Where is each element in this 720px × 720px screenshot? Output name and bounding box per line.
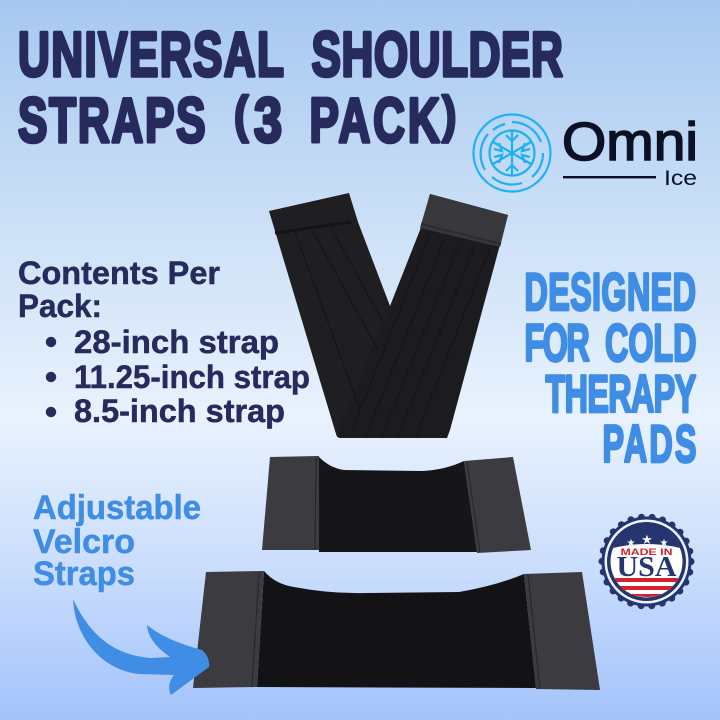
title: 3 [254,86,282,156]
contents list: 11.25-inch strap [74,359,310,395]
wordmark: Omni [562,112,698,172]
badge: made in USA: ★ [627,538,636,549]
centre velcro [257,571,536,688]
title: PACK [310,85,440,156]
velcro callout: Straps [33,555,135,593]
ribs [295,226,490,436]
red stripes [615,578,678,597]
title: ( [234,87,249,144]
title: SHOULDER [312,19,563,90]
made in text: MADE IN [620,547,672,557]
blue callout: designed for cold therapy pads: DESIGNED [524,263,696,322]
scalloped edge [602,517,691,606]
logo: Omni Ice [474,112,698,192]
left tab [193,571,264,688]
blue callout: designed for cold therapy pads: THERAPY [546,365,696,424]
velcro callout: Velcro [33,523,135,561]
navy top with stars [613,525,680,548]
bottom strap (8.5-inch) [193,571,600,690]
grey velcro end [420,194,508,247]
middle strap (11.25-inch) [262,456,531,553]
right tab [524,572,600,690]
bullets [46,337,56,347]
list items: 28-inch strap [74,324,279,360]
contents list: 8.5-inch strap [74,393,285,429]
title: UNIVERSAL [18,19,284,90]
centre velcro [319,457,477,552]
USA text: USA [616,552,677,583]
stitching [315,458,480,552]
long V strap (28-inch) [269,193,508,438]
contents list [18,255,310,429]
badge: made in USA [602,516,692,606]
badge: made in USA: ★ [641,532,653,547]
badge: made in USA: ★ [660,538,669,549]
rule [563,176,656,178]
title: STRAPS [18,85,206,156]
stitching [252,572,540,689]
right tab [464,457,531,553]
list heading: Contents Per [18,255,220,291]
left arm [269,193,447,438]
contents list: Pack: [18,288,102,324]
velcro callout: Adjustable [33,489,201,527]
title [18,19,563,156]
arrow [73,599,209,695]
title: ) [442,87,456,144]
right arm [339,194,508,438]
left tab [262,456,319,550]
velcro callout [33,489,201,593]
blue callout: designed for cold therapy pads: COLD [605,314,697,373]
blue callout: designed for cold therapy pads: FOR [524,314,590,373]
icon: snowflake rings [474,114,550,192]
blue callout: designed for cold therapy pads [524,263,696,474]
blue callout: designed for cold therapy pads: PADS [602,415,696,474]
sublabel: Ice [664,167,697,190]
